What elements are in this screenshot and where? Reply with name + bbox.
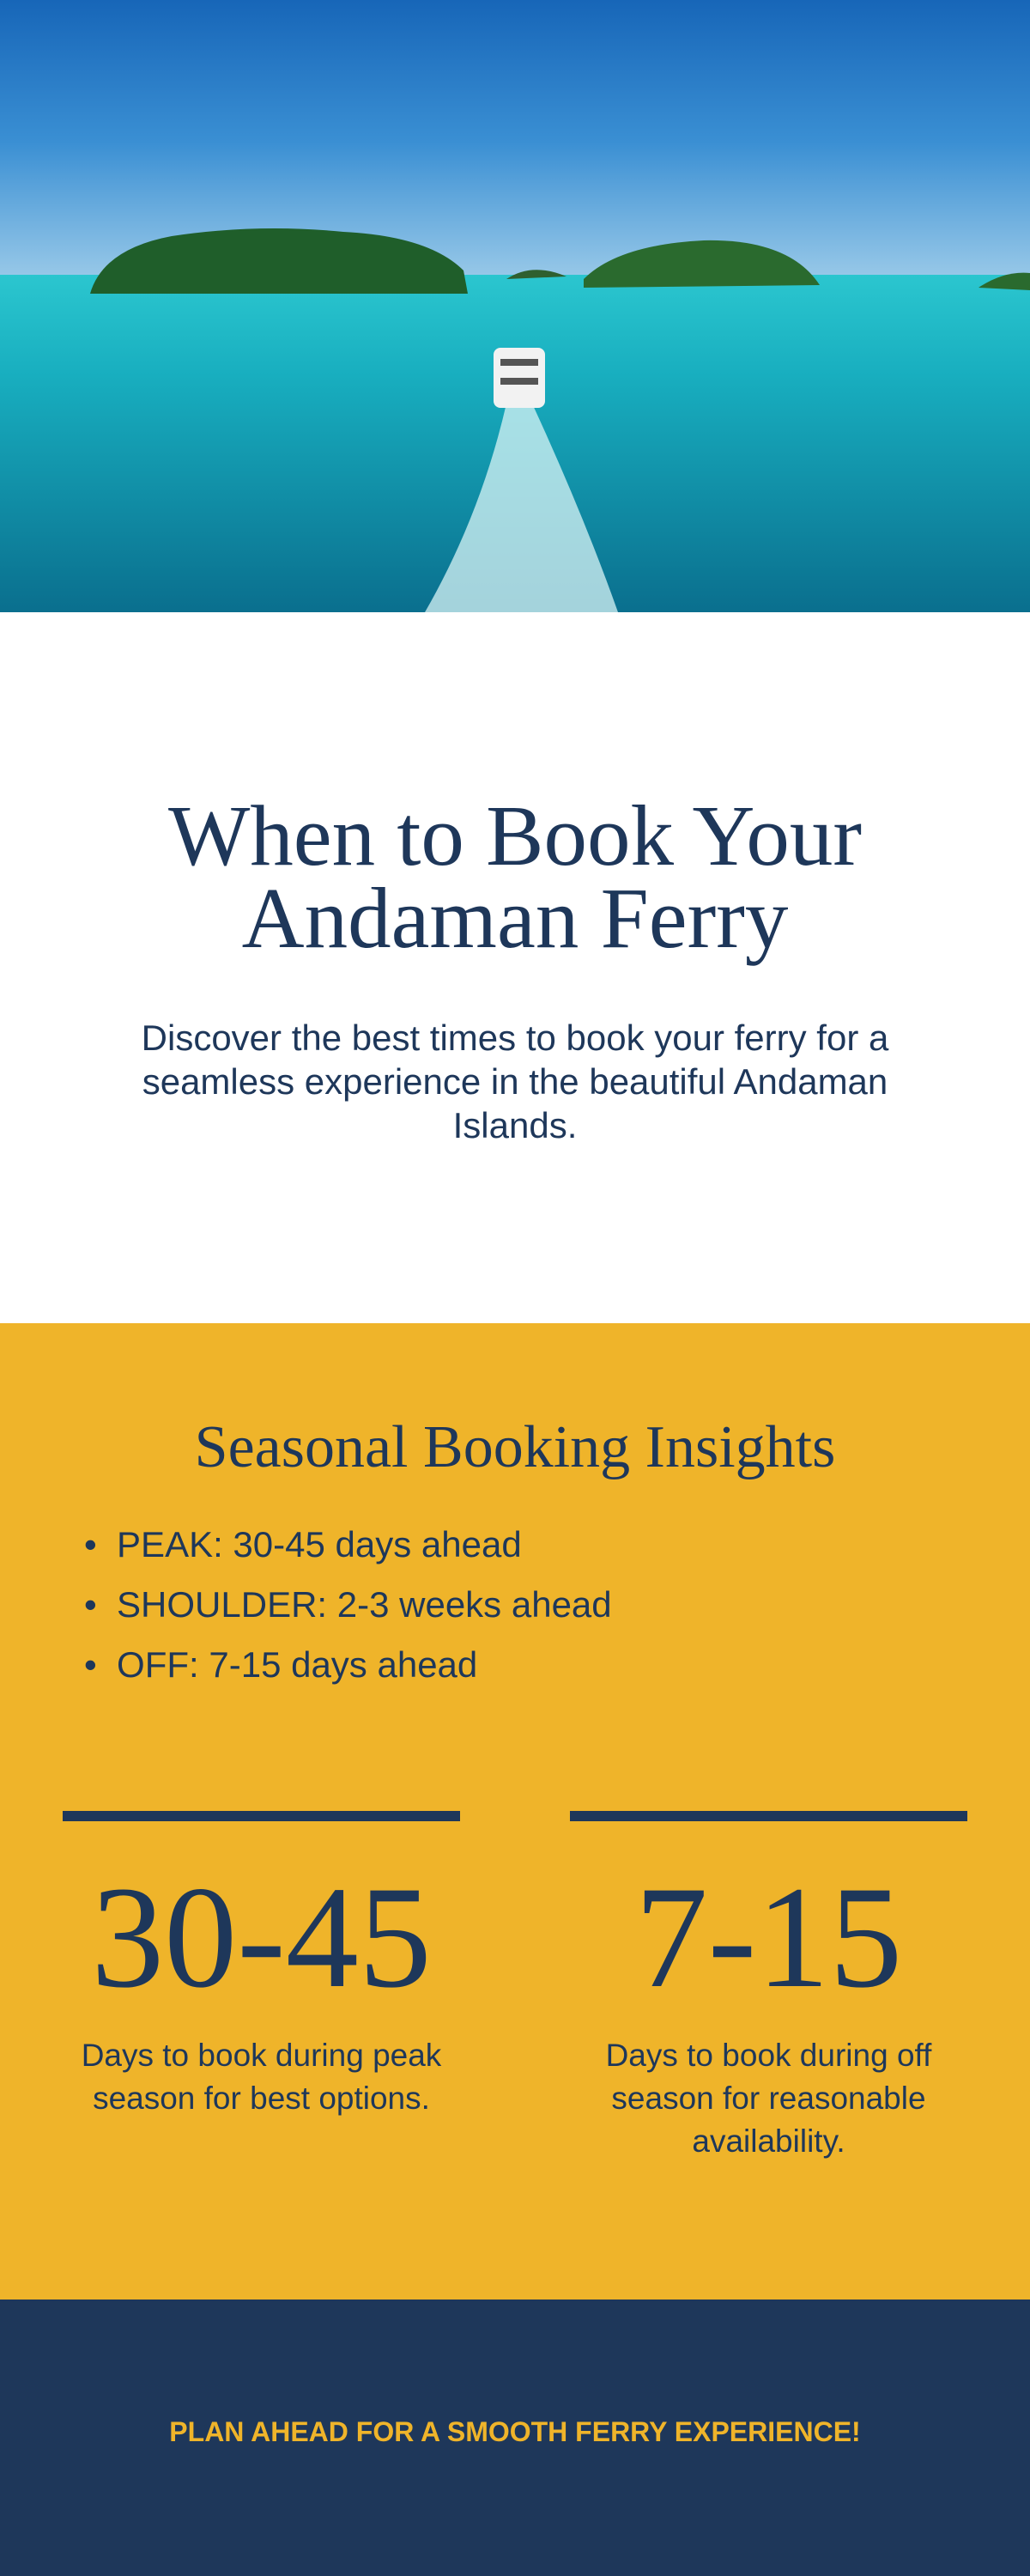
panel: seasonal insights: [0, 1323, 1030, 2300]
title: Andaman Ferry: [242, 870, 788, 966]
wake: [425, 404, 618, 612]
bullet list: • SHOULDER: 2-3 weeks ahead: [84, 1584, 612, 1625]
title: [168, 787, 862, 966]
bullet list: [84, 1524, 612, 1685]
footer text: PLAN AHEAD FOR A SMOOTH FERRY EXPERIENCE!: [169, 2416, 861, 2447]
stat: off: Days to book during off season for reasonable availability.: [606, 2038, 931, 2159]
bullet list: • PEAK: 30-45 days ahead: [84, 1524, 522, 1564]
ferry: [494, 348, 545, 408]
title: When to Book Your: [168, 787, 862, 884]
stat: peak: Days to book during peak season for best options.: [82, 2038, 441, 2116]
footer banner: [0, 2300, 1030, 2576]
stat: peak: [63, 1811, 460, 2116]
stat: peak: 30-45: [91, 1856, 432, 2018]
stat: off: 7-15: [635, 1856, 902, 2018]
islands: [90, 228, 468, 294]
heading: Seasonal Booking Insights: [195, 1414, 835, 1480]
hero photo: ferry in turquoise sea: [0, 0, 1030, 612]
subtitle: Discover the best times to book your ferry for a seamless experience in the beautiful Andaman Islands.: [142, 1018, 888, 1145]
bullet list: • OFF: 7-15 days ahead: [84, 1644, 477, 1685]
stat: off: [570, 1811, 967, 2159]
